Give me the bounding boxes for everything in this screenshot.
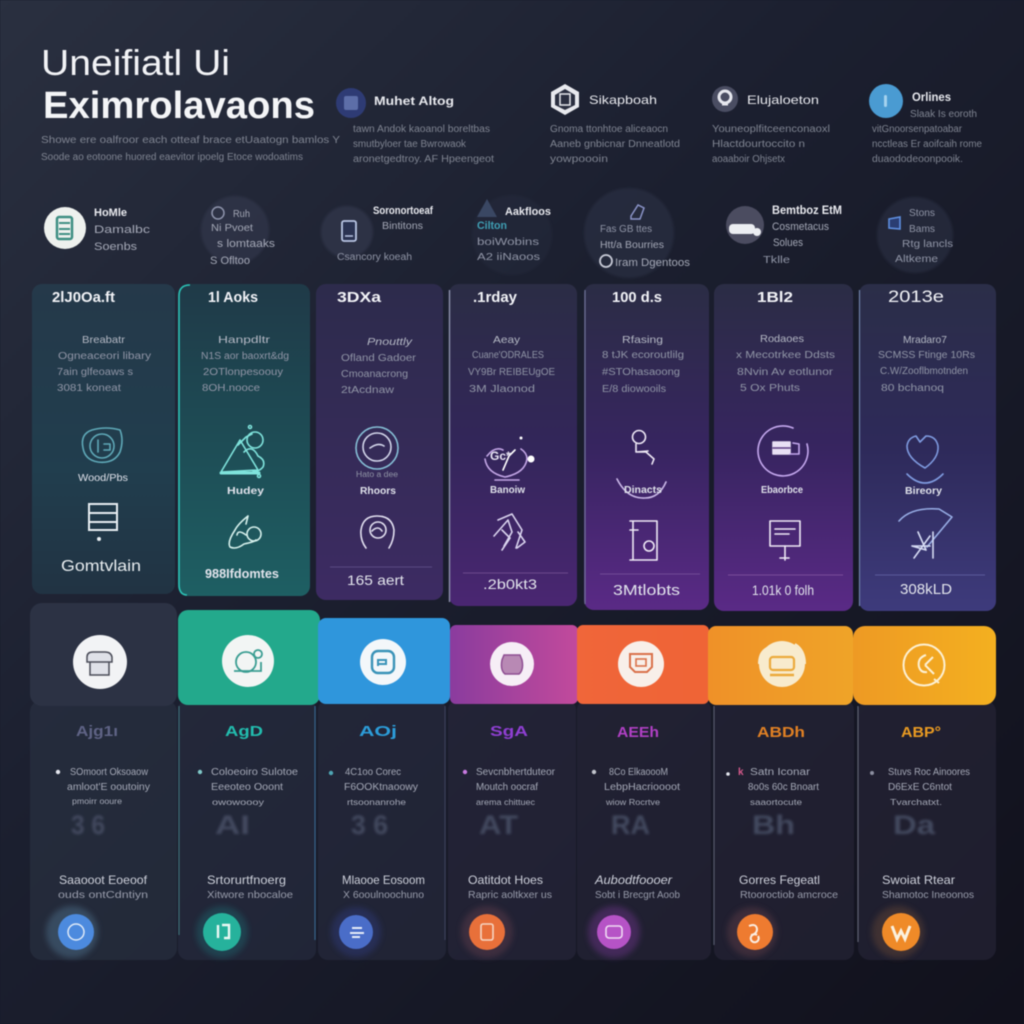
bullet <box>56 770 60 774</box>
footer value: .2b0kt3 <box>483 576 537 592</box>
feature item 2: Ni Pvoet <box>211 223 253 234</box>
bullet text <box>476 767 556 807</box>
divider <box>463 572 568 574</box>
footer text <box>207 873 293 901</box>
icon: white circle with printer <box>73 635 127 689</box>
banner: amber <box>708 626 853 705</box>
feature item 1: Soenbs <box>94 241 138 253</box>
feature item 3: Csancory koeah <box>337 252 412 263</box>
icon: cream blob with screen <box>759 641 805 687</box>
body text: #STOhasaoong <box>602 367 680 378</box>
column 6 details <box>726 724 838 957</box>
body text: E/8 diowooils <box>602 384 666 395</box>
body text: Mradaro7 <box>903 334 947 346</box>
icon: white circle with disc <box>222 635 274 687</box>
footer text <box>739 873 838 901</box>
header item: market: tawn Andok kaoanol boreltbas <box>353 124 490 135</box>
footer text: Rtooroctiob amcroce <box>740 889 838 901</box>
footer text: Aubodtfoooer <box>594 873 673 887</box>
feature item 7 <box>877 197 953 273</box>
subtitle text: Showe ere oalfroor each otteaf brace etUaatogn bamlos Y <box>41 135 340 146</box>
header item: sikapboah: Sikapboah <box>589 93 657 107</box>
feature item 7: Rtg lancls <box>902 239 953 250</box>
header item: online: vitGnoorsenpatoabar <box>872 124 963 135</box>
feature item 3: Soronortoeaf <box>373 205 433 217</box>
footer text: Rapric aoltkxer us <box>468 889 552 901</box>
header item: elujaloeton: Elujaloeton <box>747 93 819 107</box>
feature item 1: Damalbc <box>94 224 151 236</box>
icon label: Wood/Pbs <box>78 472 128 484</box>
feature item 2 <box>201 196 276 267</box>
header item: sikapboah: yowpoooin <box>550 154 608 165</box>
bullet text: Moutch oocraf <box>476 782 538 793</box>
tag: AEEh <box>617 724 659 741</box>
footer value: 988Ifdomtes <box>205 566 279 581</box>
footer text: Gorres Fegeatl <box>739 873 820 887</box>
icon: pen outline <box>631 205 644 219</box>
footer text <box>468 873 552 901</box>
bullet <box>198 770 202 774</box>
tag: ABDh <box>757 724 805 741</box>
feature item 4: boiWobins <box>477 237 539 248</box>
bullet text: Satn Iconar <box>750 767 811 778</box>
tag: SgA <box>490 723 528 740</box>
large figure: AI <box>215 810 250 840</box>
title: Eximrolavaons <box>43 85 315 127</box>
divider <box>600 573 700 575</box>
bullet text: 4C1oo Corec <box>345 767 401 778</box>
footer text: ouds ontCdntiyn <box>58 889 148 901</box>
column separators <box>179 706 858 945</box>
body text <box>341 336 417 396</box>
body text: 8OH.nooce <box>202 383 260 394</box>
footer text: Sobt i Brecgrt Aoob <box>595 889 680 901</box>
panel: column 6 <box>714 284 853 611</box>
panel: column 7 <box>859 284 996 611</box>
feature item 6: Bemtboz EtM <box>772 203 842 217</box>
header item: online: duaododeoonpooik. <box>872 154 963 165</box>
body text: 8Nvin Av eotlunor <box>737 367 834 378</box>
large figure: Bh <box>752 810 795 840</box>
icon: seat with ring <box>617 430 666 498</box>
translucent circle <box>584 188 674 278</box>
footer text: X 6ooulnoochuno <box>343 889 424 901</box>
icon label: Dinacts <box>624 484 662 496</box>
body text: Rfasing <box>622 334 663 346</box>
icon: stacked rows <box>89 504 117 540</box>
bullet text: pmoirr ooure <box>72 796 122 806</box>
footer text: Oatitdot Hoes <box>468 873 543 887</box>
body text: 5 Ox Phuts <box>740 383 800 394</box>
translucent circle <box>321 206 373 258</box>
footer text: Saaooot Eoeoof <box>59 873 148 887</box>
header item: elujaloeton: aoaaboir Ohjsetx <box>712 154 785 165</box>
bullet text: D6ExE C6ntot <box>888 782 952 793</box>
panel: column 2 <box>178 284 310 596</box>
icon: triangle <box>477 199 497 217</box>
bullet text <box>888 767 970 807</box>
feature item 4: A2 iiNaoos <box>477 252 540 263</box>
footer text <box>882 873 974 901</box>
title: Uneifiatl Ui <box>41 42 230 83</box>
body text: C.W/Zooflbmotnden <box>880 366 968 377</box>
feature item 4: Cilton <box>477 220 507 232</box>
body text: Cmoanacrong <box>341 369 408 380</box>
footer text: Xitwore nbocaloe <box>207 889 293 901</box>
icon: ring with box <box>758 426 808 476</box>
lower panels backdrop <box>30 700 996 960</box>
icon: blue orb <box>869 84 903 118</box>
body text: 3M Jlaonod <box>469 384 535 395</box>
divider <box>330 566 432 568</box>
year heading: 1Bl2 <box>757 289 793 306</box>
footer value: 3Mtlobts <box>613 582 680 599</box>
header item: market: Muhet Altog <box>374 94 454 108</box>
icon: round badge <box>82 428 122 462</box>
feature item 2: S Ofltoo <box>210 255 250 267</box>
icon label: Bireory <box>905 485 942 497</box>
feature item 6: Cosmetacus <box>772 221 829 233</box>
tag: AOj <box>359 723 397 740</box>
footer value: 165 aert <box>347 572 404 588</box>
icon label: Hudey <box>227 485 264 497</box>
bullet <box>726 772 730 776</box>
tag: ABP° <box>901 724 941 741</box>
bullet text: 8Co ElkaoooM <box>609 767 668 778</box>
icon: round badge <box>712 86 738 112</box>
body text: Ogneaceori libary <box>58 351 151 362</box>
icon: heart with nodes: Gc* <box>490 449 511 463</box>
body text: VY9Br REIBEUgOE <box>468 367 555 378</box>
header item: sikapboah: Gnoma ttonhtoe aliceaocn <box>550 124 668 135</box>
feature item 6: Solues <box>773 237 803 249</box>
body text: 2OTlonpesoouy <box>203 367 283 378</box>
header item: market <box>336 88 494 165</box>
body text <box>57 334 151 394</box>
icon: orange orb <box>461 906 513 958</box>
body text: Hanpdltr <box>218 334 271 346</box>
bullet text: Sevcnbhertduteor <box>476 767 556 778</box>
tag: Ajg1ı <box>76 723 118 740</box>
year heading: .1rday <box>473 289 518 306</box>
bullet text: SOmoort Oksoaow <box>70 767 149 778</box>
body text <box>878 334 975 394</box>
footer text: Mlaooe Eosoom <box>342 873 425 887</box>
feature item 2: s lomtaaks <box>217 238 276 250</box>
body text: 3081 koneat <box>57 383 121 394</box>
bullet text <box>738 767 819 807</box>
bullet <box>463 770 467 774</box>
icon: abstract figure <box>229 516 261 548</box>
bullet text <box>67 767 150 806</box>
large figure: 3 6 <box>351 810 388 840</box>
footer value: Gomtvlain <box>61 558 141 575</box>
feature item 1 <box>44 207 151 253</box>
icon: purple orb <box>588 906 640 958</box>
feature item 5: Iram Dgentoos <box>615 257 691 269</box>
bullet <box>870 771 874 775</box>
divider <box>875 574 985 576</box>
column 3 details <box>329 723 425 957</box>
panel: column 3 <box>316 284 443 600</box>
header item: sikapboah: Aaneb gnbicnar Dnneatlotd <box>550 139 680 150</box>
icon: document <box>630 521 657 560</box>
icon: heart with nodes <box>485 436 534 480</box>
body text <box>201 334 289 394</box>
icon: dark orb with white shape <box>726 206 764 244</box>
bullet <box>592 770 596 774</box>
bullet text: rtsoonanrohe <box>347 797 406 807</box>
year heading: 3DXa <box>337 289 382 306</box>
icon: blue orb <box>46 906 98 958</box>
banner: dark <box>30 603 177 706</box>
header item: elujaloeton <box>712 86 830 165</box>
footer text: Srtorurtfnoerg <box>207 873 286 887</box>
icon: white clipboard <box>44 207 86 249</box>
footer text <box>58 873 148 901</box>
feature item 7: Bams <box>909 224 935 235</box>
icon: small globe <box>212 207 224 219</box>
icon label: Ebaorbce <box>761 484 803 496</box>
subtitle text <box>41 135 340 163</box>
bullet text: saaortocute <box>750 797 802 807</box>
icon: white circle with jar <box>490 642 534 686</box>
subtitle text: Soode ao eotoone huored eaevitor ipoelg Etoce wodoatims <box>41 152 303 163</box>
bullet text: wiow Rocrtve <box>605 797 660 807</box>
column 2 details <box>196 723 298 958</box>
bullet text: amloot'E ooutoiny <box>67 782 150 793</box>
icon: tablet <box>342 221 356 241</box>
footer text: Swoiat Rtear <box>882 873 955 887</box>
icon: ring with figure <box>904 644 944 686</box>
icon: signboard <box>770 521 800 560</box>
body text: Rodaoes <box>760 333 804 345</box>
year heading: 2lJ0Oa.ft <box>52 289 115 306</box>
large figure: AT <box>479 810 519 840</box>
icon: concentric circle <box>356 427 398 469</box>
body text: N1S aor baoxrt&dg <box>201 351 289 362</box>
year heading: 2013e <box>888 287 944 306</box>
feature item 6: Tklle <box>763 255 791 266</box>
divider <box>728 574 843 576</box>
panel: column 5 <box>584 284 709 610</box>
body text: 80 bchanoq <box>881 383 944 394</box>
feature item 4: Aakfloos <box>505 206 551 218</box>
footer value: 1.01k 0 folh <box>752 582 814 598</box>
bullet text: Stuvs Roc Ainoores <box>888 767 970 778</box>
banner: yellow <box>853 626 996 705</box>
bullet text: Tvarchatxt. <box>890 797 942 807</box>
body text: Cuane'ODRALES <box>472 350 544 361</box>
icon: teal orb <box>196 906 248 958</box>
feature item 5 <box>584 188 691 278</box>
icon: tangled glyph <box>494 514 525 550</box>
bullet text: k <box>738 767 744 778</box>
year heading: 1l Aoks <box>208 289 258 306</box>
bullet text <box>604 767 680 807</box>
bullet text: owowoooy <box>212 797 265 807</box>
header item: elujaloeton: Youneoplfitceenconaoxl <box>712 124 830 135</box>
panel: column 1 <box>32 284 175 594</box>
header item: online: Slaak Is eoroth <box>910 109 977 120</box>
feature item 5: Fas GB ttes <box>600 224 652 235</box>
bullet text: Eeeoteo Ooont <box>211 782 283 793</box>
feature item 3: Bintitons <box>382 221 423 232</box>
banner: blue <box>318 618 450 704</box>
large figure: 3 6 <box>71 810 105 840</box>
header item: market: smutbyloer tae Bwrowaok <box>353 139 467 150</box>
header item: market: aronetgedtroy. AF Hpeengeot <box>353 154 494 165</box>
body text: x Mecotrkee Ddsts <box>736 350 835 361</box>
icon: ring <box>600 255 612 267</box>
icon: white circle with frame <box>360 639 406 685</box>
footer value: 308kLD <box>900 581 952 598</box>
feature item 7: Altkeme <box>895 254 939 265</box>
bullet text: F6OOKtnaoowy <box>344 782 418 793</box>
banner: orange <box>577 625 709 704</box>
small caption: Hato a dee <box>356 470 399 479</box>
footer text <box>594 873 680 901</box>
translucent circle <box>201 196 269 264</box>
body text: Ofland Gadoer <box>341 353 417 364</box>
footer text: Shamotoc Ineoonos <box>882 889 974 901</box>
feature item 7: Stons <box>909 208 935 219</box>
column 1 details <box>46 723 150 958</box>
icon: amber orb <box>872 906 924 958</box>
header item: online: ncctleas Er aoifcaih rome <box>872 139 982 150</box>
column 5 details <box>588 724 680 958</box>
large figure: RA <box>611 810 650 840</box>
bullet text: Coloeoiro Sulotoe <box>211 767 298 778</box>
body text: 7ain glfeoaws s <box>57 367 133 378</box>
header item: sikapboah <box>550 84 680 165</box>
column 7 details <box>870 724 974 958</box>
bullet text <box>344 767 418 807</box>
icon: orange orb <box>727 907 777 957</box>
bullet <box>329 771 333 775</box>
icon: blue orb <box>331 907 381 957</box>
feature item 2: Ruh <box>233 209 250 220</box>
translucent circle <box>472 195 552 275</box>
feature item 3 <box>321 205 433 263</box>
feature item 6 <box>726 203 842 266</box>
icon: white circle with shield <box>618 641 664 687</box>
bullet text: LebpHacrioooot <box>604 782 680 793</box>
icon: hexagon <box>551 84 579 115</box>
icon: spiral head <box>361 516 394 548</box>
feature item 5: Htt/a Bourries <box>600 240 664 251</box>
body text <box>602 334 684 395</box>
column 4 details <box>461 723 556 958</box>
banner: magenta <box>450 625 578 704</box>
body text: Pnouttly <box>367 336 413 348</box>
body text: 8 tJK ecoroutlilg <box>602 350 684 361</box>
body text: SCMSS Ftinge 10Rs <box>878 350 975 361</box>
header item: online: Orlines <box>912 90 951 104</box>
translucent circle <box>877 197 953 273</box>
bullet text: 8o0s 60c Bnoart <box>748 782 819 793</box>
icon label: Banoiw <box>490 484 526 496</box>
tag: AgD <box>225 723 263 740</box>
body text: 2tAcdnaw <box>341 385 395 396</box>
header item: online <box>869 84 982 165</box>
bullet text <box>211 767 298 807</box>
title <box>41 42 315 127</box>
icon: compass star <box>899 509 952 558</box>
icon: market badge <box>336 88 366 118</box>
body text <box>736 333 835 394</box>
large figure: Da <box>893 810 936 840</box>
header item: elujaloeton: Hlactdourtoccito n <box>712 139 805 150</box>
feature item 4 <box>472 195 552 275</box>
icon: blue box <box>889 217 900 229</box>
feature item 1: HoMle <box>94 207 127 219</box>
body text: Breabatr <box>82 334 126 346</box>
icon: mountain figure <box>221 426 264 478</box>
banner: green <box>178 610 320 705</box>
panel: column 4 <box>449 284 577 606</box>
body text <box>468 334 555 395</box>
year heading: 100 d.s <box>612 289 662 306</box>
icon label: Rhoors <box>360 485 396 497</box>
icon: shield with arc <box>907 436 943 483</box>
bullet text: arema chittuec <box>476 797 536 807</box>
footer text <box>342 873 425 901</box>
body text: Aeay <box>493 334 521 346</box>
